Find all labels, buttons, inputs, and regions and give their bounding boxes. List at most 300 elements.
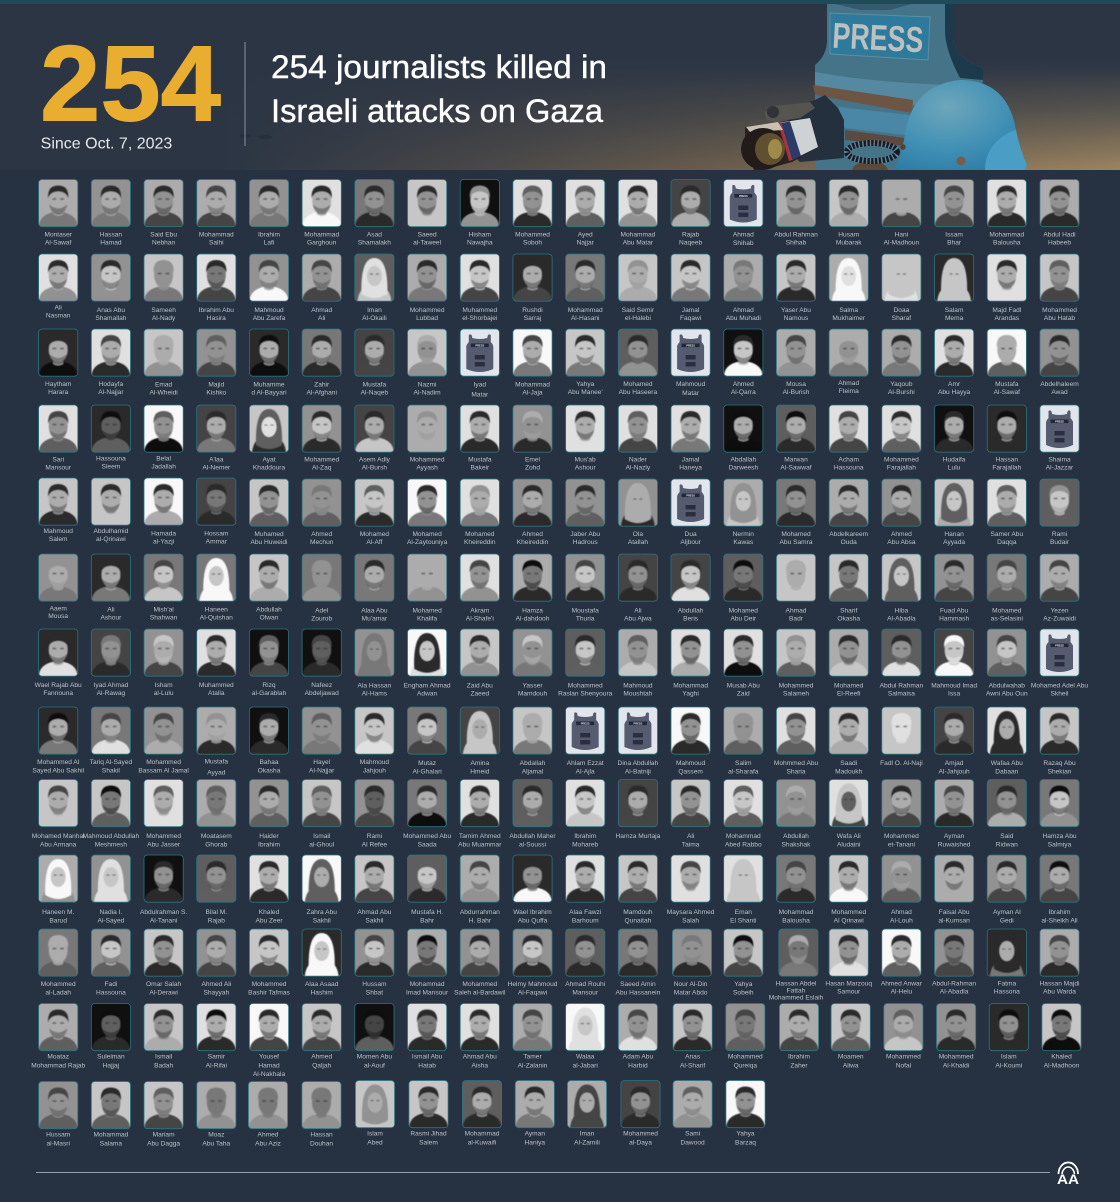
card: Abdallah Aljamal	[513, 707, 552, 776]
card: Ahmad Fteima: Ahmad	[838, 380, 859, 387]
card: Ahmad Ali	[302, 254, 341, 322]
card: Yaqoub Al-Burshi	[882, 329, 921, 396]
card: Hamza Al-dahdooh: Al-dahdooh	[516, 616, 550, 622]
card: Ahmed Ali Shayyah: Ahmed Ali	[201, 981, 232, 988]
card: Mohammed Abu Saada	[403, 780, 451, 848]
card: Hodayfa Al-Najjar: Hodayfa	[99, 381, 124, 388]
card: Abdul-Rahman Al-Abadla: Abdul-Rahman	[932, 980, 976, 987]
card: Ahmad Al-Louh: Al-Louh	[890, 918, 913, 925]
card: Iyad Ahmad Al-Rawag: Al-Rawag	[97, 690, 126, 697]
card: Hamza Abu Salmiya: Salmiya	[1048, 842, 1072, 848]
card: Hodayfa Al-Najjar: Al-Najjar	[98, 389, 124, 396]
card: A'laa Al-Nemer: Al-Nemer	[202, 464, 231, 472]
card: Mamdouh Qunaitah	[618, 855, 658, 925]
card: Muhammed Al-Bayyari: Muhamme	[253, 382, 285, 388]
card: Abdullah Maher al-Soussi: al-Soussi	[519, 842, 547, 848]
card: Jamal Haneya: Haneya	[679, 464, 702, 472]
card: Ahmad Rouhi Mansour: Ahmad Rouhi	[565, 981, 606, 988]
card: Hassan Douhan: Hassan	[310, 1132, 333, 1139]
card: Alaa Abu Mu'amar	[355, 554, 394, 622]
card: Mohamed Kheireddin	[460, 479, 499, 546]
card: Ali Ashour	[91, 554, 130, 622]
card: Fadi Hassouna: Fadi	[104, 981, 118, 988]
card: Abdulwahab Awni Abu Oun	[986, 629, 1028, 698]
card: Mahmoud Abu Zarefa: Abu Zarefa	[253, 315, 286, 322]
card: Yahya Sobeih: Yahya	[734, 981, 753, 988]
card: Hudaifa Lulu: Lulu	[948, 464, 961, 472]
card: Ayman Haniya	[515, 1080, 554, 1147]
card: Doaa Sharaf	[882, 254, 921, 322]
card: Mohamed Al-Aff: Mohamed	[360, 531, 389, 538]
card: Haneen M. Barud: Barud	[49, 918, 67, 925]
card: Yahya Abu Manee'	[566, 329, 605, 396]
card: Haneen M. Barud	[39, 855, 78, 925]
card: Alaa Fawzi Barhoum: Alaa Fawzi	[569, 909, 602, 916]
card: Ayat Khaddoura	[249, 405, 289, 472]
card: Mohammed Salameh: Salameh	[783, 690, 809, 698]
card: Mohammed Abu Hatab: Abu Hatab	[1044, 315, 1075, 322]
card: Mus'ab Ashour: Mus'ab	[575, 456, 596, 464]
card: Sharif Okasha	[829, 554, 868, 622]
card: Adam Abu Harbid: Harbid	[628, 1062, 648, 1070]
card: Hassan Hamad: Hamad	[100, 240, 122, 246]
card: Yasser Mamdouh: Mamdouh	[518, 690, 547, 698]
card: Mohammed al-Ladah: Mohammed	[41, 981, 76, 988]
card: Ayman Haniya: Haniya	[525, 1140, 545, 1147]
card: Aaem Mousa: Mousa	[48, 613, 68, 620]
card: Musab Abu Zaid: Musab Abu	[727, 682, 760, 690]
card: Helmy Mahmoud Al-Faqawi: Helmy Mahmoud	[508, 981, 558, 988]
card: Mohamed Abu Deir: Abu Deir	[730, 616, 757, 622]
card: Mahmoud Salem	[39, 478, 78, 543]
card: Ahmed Anwar Al-Helu	[881, 929, 923, 996]
card: Shaima Al-Jazzar: Shaima	[1048, 456, 1071, 464]
card: Mohammad Abed Rabbo: Abed Rabbo	[725, 842, 762, 848]
card: Nermin Kawas	[724, 479, 763, 546]
card: Doaa Sharaf: Doaa	[894, 307, 910, 314]
card: Mohammad Abu Matar: Mohammad	[620, 232, 656, 238]
card: Ahmad Abu Sakhil: Ahmad Abu	[357, 909, 392, 916]
card: Mahmoud Jahjouh: Jahjouh	[363, 768, 386, 774]
card: Abdelkareem Ouda: Abdelkareem	[829, 531, 869, 538]
card: Islam Abed: Abed	[367, 1140, 383, 1147]
card: Ahmed Kheireddin	[513, 479, 552, 546]
logo: Anadolu Agency: AA	[1057, 1171, 1079, 1187]
card: Hanan Ayyada	[934, 479, 974, 546]
card: Mohamed El-Reefi	[829, 629, 868, 698]
card: Haneen Al-Qutshan: Al-Qutshan	[200, 614, 233, 622]
card: Hassan Douhan	[302, 1082, 341, 1148]
card: Mahmoud Qassem: Qassem	[678, 768, 703, 776]
card: Yousef Hamad Al-Nakhala: Hamad	[258, 1062, 280, 1070]
footer line	[36, 1172, 1050, 1174]
card: Abdul Hadi Habeeb: Abdul Hadi	[1043, 232, 1076, 238]
card: Ahlam Ezzat Al-Ajla	[566, 707, 605, 776]
card: Ahmad Abu Sakhil	[355, 855, 394, 925]
card: Mohammad Balousha	[987, 180, 1026, 246]
card: Abdulrahman S. Al-Tanani: Abdulrahman S.	[140, 909, 187, 916]
card: Ayman Al Gedi	[987, 855, 1026, 925]
card: Hiba Al-Abadla	[882, 554, 921, 622]
big number: 254	[40, 22, 221, 144]
card: Moatasem Ghorab: Moatasem	[201, 833, 232, 840]
card: Haytham Harara: Haytham	[45, 381, 72, 388]
card: Ibrahim al-Sheikh Ali: Ibrahim	[1048, 909, 1071, 916]
card: Mahmoud Abdullah Meshmesh	[83, 780, 139, 848]
card: Moaz Abu Taha	[197, 1082, 236, 1148]
card: Mohamed Manhal Abu Armana: Abu Armana	[40, 842, 77, 848]
card: Mohammed Abu Saada: Saada	[418, 842, 437, 848]
card: Said Semir el-Halebi	[618, 254, 658, 322]
card: Mohammed Bashir Tafmas: Bashir Tafmas	[248, 990, 291, 997]
card: Sameh Al-Nady	[144, 254, 183, 322]
card: Mohammed Al-Khaldi: Mohammed	[939, 1054, 974, 1061]
card: Abdul-Rahman Al-Abadla: Al-Abadla	[940, 989, 969, 996]
card: Mohammed Al Sayed Abu Sakhil	[32, 707, 85, 774]
card: Mohammed al-Ladah	[39, 929, 78, 997]
card: Issam Bhar	[934, 180, 974, 246]
card: Amjad Al-Jahjouh: Amjad	[945, 760, 964, 767]
card: Amr Abu Hayya: Abu Hayya	[938, 389, 971, 396]
card: Amr Abu Hayya: Amr	[948, 381, 961, 388]
card: Saadi Madoukh: Saadi	[840, 760, 858, 767]
card: Asad Shamalakh: Shamalakh	[358, 240, 391, 246]
card: Mahmoud Matar: Matar	[682, 390, 700, 397]
card: Adel Zourob: Zourob	[311, 616, 332, 622]
card: Abdul Rahman Salmaisa: Abdul Rahman	[880, 682, 924, 690]
card: Moataz Mohammad Rajab: Moataz	[47, 1054, 69, 1061]
card: Rasmi Jihad Salem: Rasmi Jihad	[410, 1131, 447, 1138]
card: Mohammed Al-Khaldi: Al-Khaldi	[943, 1062, 970, 1070]
card: Yahya Sobeih: Sobeih	[733, 990, 754, 997]
card: Ibrahim Mohareb: Ibrahim	[574, 833, 597, 840]
card: Alaa Asaad Hashim	[302, 929, 341, 997]
card: Faisal Abu al-Kumsan: Faisal Abu	[939, 909, 970, 916]
card: Mohammad Imad Mansour: Imad Mansour	[406, 990, 449, 997]
card: Wafaa Abu Dabaan	[987, 707, 1026, 776]
card: Majd Fadl Arandas	[987, 254, 1026, 322]
card: Ahmed Mechun: Ahmed	[311, 531, 332, 538]
card: Abdul Rahman Shihab: Shihab	[786, 240, 807, 246]
card: Doaa Sharaf: Sharaf	[892, 315, 911, 322]
card: Emel Zohd	[513, 405, 552, 472]
header banner	[250, 4, 1120, 170]
card: Ahmad Ali: Ahmad	[311, 307, 332, 314]
card: Eman El Shanti: Eman	[735, 909, 752, 916]
card: Sami Dawood	[673, 1080, 712, 1147]
card: Hamza Abu Salmiya: Hamza Abu	[1042, 833, 1077, 840]
card: Ayman Haniya: Ayman	[525, 1131, 545, 1138]
card: Mohammed Nofal	[884, 1004, 923, 1070]
card: Ahlam Ezzat Al-Ajla: Al-Ajla	[576, 768, 595, 776]
card: Abdallah Darweesh	[724, 405, 763, 472]
card: Rushdi Sarraj: Rushdi	[522, 307, 543, 314]
card: Rasmi Jihad Salem	[409, 1080, 448, 1147]
card: Nader Al-Nazly: Nader	[629, 456, 648, 464]
card: Jamal Faqawi: Jamal	[682, 307, 700, 314]
card: Ahmad Abu Muhadi: Ahmad	[733, 307, 754, 314]
card: Ahmed Anwar Al-Helu: Ahmed Anwar	[881, 980, 923, 987]
card: Abdullah Shakshak: Shakshak	[782, 842, 811, 848]
card: Abdullah Olwan	[249, 554, 289, 622]
card: Hanan Ayyada: Ayyada	[943, 539, 965, 546]
card: Abdallah Aljamal: Abdallah	[520, 760, 546, 767]
card: Faisal Abu al-Kumsan: al-Kumsan	[938, 918, 970, 925]
card: Emad Al-Wheidi	[144, 329, 183, 396]
card: Nadia I. Al-Sayed: Nadia I.	[100, 909, 122, 916]
card: Ahmad Shihab: Ahmad	[733, 232, 754, 238]
card: Ahmad Rouhi Mansour: Mansour	[572, 990, 599, 997]
card: Yahya Abu Manee': Yahya	[576, 381, 595, 388]
card: Mohamed Adel Abu Skheil	[1031, 629, 1088, 698]
card: Said Ebu Nebhan: Said Ebu	[150, 232, 177, 238]
card: Ala Hassan Al-Hams: Al-Hams	[362, 690, 388, 698]
card: Omar Salah Al-Derawi: Al-Derawi	[149, 990, 178, 997]
card: Ibrahim al-Sheikh Ali: al-Sheikh Ali	[1041, 918, 1078, 925]
card: Ahmed Al-Qarra	[724, 329, 763, 396]
card: Ismail Abu Hatab	[408, 1004, 447, 1070]
card: Moataz Mohammad Rajab	[31, 1004, 85, 1070]
card: Hamza Abu Salmiya	[1040, 780, 1079, 848]
card: Zaid Abu Zaeed: Zaeed	[470, 690, 489, 698]
card: Asem Adly Al-Bursh: Al-Bursh	[362, 464, 387, 472]
card: Khaled Abu Zeer	[249, 855, 289, 925]
card: Momen Abu al-Aouf: al-Aouf	[364, 1062, 385, 1070]
card: Ahmad Abu Aisha: Ahmad Abu	[463, 1054, 497, 1061]
card: Ali Abu Ajwa: Ali	[634, 608, 642, 614]
card: Ayman Ruwaished: Ruwaished	[938, 842, 971, 848]
card: Montaser Al-Sawaf: Al-Sawaf	[45, 240, 72, 246]
card: Dua Aljbour	[671, 479, 710, 546]
card: Mohamed Abu Deir	[724, 554, 763, 622]
card: Bilal M. Rajab: Rajab	[208, 918, 225, 925]
card: Mohammad Salama	[91, 1082, 130, 1148]
title: Israeli attacks on Gaza	[271, 93, 604, 129]
card: Akram Al-Shafe'i: Akram	[470, 608, 490, 614]
card: Mustafa Bakeir: Mustafa	[468, 456, 492, 464]
card: Hassan Douhan: Douhan	[310, 1141, 333, 1148]
card: Mohamed Al-Aff: Al-Aff	[366, 539, 383, 546]
card: Rushdi Sarraj: Sarraj	[524, 315, 542, 322]
card: Ayman Al Gedi: Ayman Al	[993, 909, 1021, 916]
card: Hussam Shbat: Shbat	[366, 990, 383, 997]
card: Bahaa Okasha	[249, 707, 289, 774]
card: Mohammad al-Kuwaifi	[462, 1080, 502, 1147]
card: Moamen Aliwa: Aliwa	[843, 1062, 859, 1070]
card: Ahmad Fteima: Fteima	[839, 388, 859, 395]
card: Ibrahim Lafi	[249, 180, 289, 246]
card: Fadi Hassouna	[91, 929, 130, 997]
card: Helmy Mahmoud Al-Faqawi	[508, 929, 558, 997]
card: Suleiman Hajjaj: Suleiman	[97, 1054, 125, 1061]
card: Mutaz Al-Ghalari	[408, 707, 447, 776]
card: Emel Zohd: Zohd	[525, 464, 540, 472]
card: Rami Budair	[1040, 479, 1079, 546]
card: Mohamed Khalifa: Mohamed	[412, 608, 442, 614]
card: Wael Ibrahim Abu Quffa	[513, 855, 552, 925]
card: Ibrahim Abu Hasira: Hasira	[207, 315, 226, 322]
card: Musab Abu Zaid: Zaid	[737, 690, 750, 698]
card: Ahmed Qaljah: Qaljah	[312, 1062, 332, 1070]
card: Mohammad Al-Jaja: Mohammad	[515, 382, 550, 388]
card: Ismail Badah: Ismail	[155, 1054, 173, 1061]
card: Mohammed Ayyash: Mohammed	[410, 456, 445, 464]
card: Mutaz Al-Ghalari: Al-Ghalari	[412, 768, 442, 776]
card: Abdul Rahman Salmaisa	[880, 629, 924, 698]
card: Anas Al-Sharif: Anas	[685, 1054, 701, 1061]
card: Mohamed Abu Haseera	[618, 329, 658, 396]
card: Hisham Nawajha: Nawajha	[467, 240, 493, 246]
card: Moustafa Thuria: Thuria	[576, 616, 595, 622]
card: Ahmed Mechun: Mechun	[310, 539, 334, 546]
card: Hussam al-Masri	[39, 1082, 78, 1148]
card: Tamim Ahmed Abu Muammar: Tamim Ahmed	[459, 833, 501, 840]
card: Mohammad Abed Rabbo: Mohammad	[726, 833, 761, 840]
card: Mohammed Raslan Shenyoura: Mohammed	[568, 682, 603, 690]
card: Ibrahim Mohareb	[566, 780, 605, 848]
card: Mustafa Al-Sawaf	[987, 329, 1026, 396]
card: Ali Abu Ajwa	[618, 554, 658, 622]
card: Mohammed Al-Zaq	[302, 405, 341, 472]
card: Hayel Al-Najjar	[302, 707, 341, 774]
card: Hisham Nawajha	[460, 180, 499, 246]
card: Zaid Abu Zaeed: Zaid Abu	[467, 682, 493, 690]
card: Ayed Najjar: Najjar	[577, 240, 595, 246]
card: Abdurrahman H. Bahr: Abdurrahman	[460, 909, 500, 916]
card: Mohammed Abu Jasser: Abu Jasser	[147, 842, 181, 848]
card: Moatasem Ghorab	[197, 780, 236, 848]
card: Haider Ibrahim	[249, 780, 289, 848]
card: Saadi Madoukh: Madoukh	[835, 768, 863, 776]
card: Moatasem Ghorab: Ghorab	[205, 842, 228, 848]
card: Saeed al-Taweel: Saeed	[418, 232, 437, 238]
card: Fadi Hassouna: Hassouna	[96, 990, 126, 997]
card: Bahaa Okasha: Bahaa	[259, 759, 279, 766]
card: Amina Hmeid: Amina	[470, 760, 489, 767]
card: Muhammed Atalla: Atalla	[208, 690, 225, 697]
card: Ahmed Kheireddin: Ahmed	[522, 531, 543, 538]
card: Iyad Matar: Iyad	[474, 382, 486, 388]
card: Fuad Abu Hammash: Hammash	[939, 616, 969, 622]
card: Ayed Najjar	[566, 180, 605, 246]
card: Tariq Al-Sayed Shakil: Tariq Al-Sayed	[90, 759, 132, 766]
card: Ahmed Kheireddin: Kheireddin	[517, 539, 549, 546]
card: Hasan Marzouq Samour	[825, 929, 872, 996]
card: Alaa Fawzi Barhoum: Barhoum	[572, 918, 599, 925]
card: Mamdouh Qunaitah: Qunaitah	[625, 918, 652, 925]
card: Ahmad Al-Louh: Ahmad	[891, 909, 912, 916]
card: Mohammed Abu Jasser	[144, 780, 183, 848]
card: Momen Abu al-Aouf	[355, 1004, 394, 1070]
card: Mohammed Abu Jasser: Mohammed	[146, 833, 181, 840]
card: Mohammed Raslan Shenyoura	[558, 629, 613, 698]
card: Mohammed Ayyash	[408, 405, 447, 472]
card: Anas Al-Sharif: Al-Sharif	[680, 1062, 705, 1070]
card: Muhammed Atalla	[197, 629, 236, 697]
card: Mohmmed Abu Sharia	[774, 707, 818, 776]
card: Abdulwahab Awni Abu Oun: Awni Abu Oun	[986, 690, 1028, 698]
card: Mohamed as-Selasini	[987, 554, 1026, 622]
card: Muhamed Abu Huweidi: Abu Huweidi	[250, 539, 288, 546]
card: Mohamed Al-Zaytouniya	[407, 479, 448, 546]
card: Mariam Abu Dagga	[144, 1082, 183, 1148]
card: A'laa Al-Nemer	[197, 405, 236, 472]
card: Mohammed Abu Hatab: Mohammed	[1042, 307, 1077, 314]
card: Saeed al-Taweel	[408, 180, 447, 246]
card: Majd Fadl Arandas: Majd Fadl	[992, 307, 1022, 314]
card: Ahmed Abu Absa	[882, 479, 921, 546]
card: Mustafa Ayyad	[197, 707, 236, 776]
card: Ahmed Abu Aziz: Abu Aziz	[255, 1141, 281, 1148]
card: Ahmad Badr	[776, 554, 816, 622]
card: Ahmed Qaljah: Ahmed	[311, 1054, 332, 1061]
card: Mustafa Ayyad: Mustafa	[205, 758, 228, 765]
card: Ali Ashour: Ali	[107, 606, 115, 614]
card: Zahra Abu Sakhil: Sakhil	[313, 918, 331, 925]
card: Hossam Ammar: Ammar	[206, 538, 228, 546]
card: Rami Budair: Budair	[1050, 539, 1070, 546]
card: Mohammed Al Sayed Abu Sakhil: Mohammed Al	[37, 759, 80, 766]
card: Bilal M. Rajab	[197, 855, 236, 925]
card: Suleiman Hajjaj	[91, 1004, 130, 1070]
card: Mohamed Adel Abu Skheil: Skheil	[1051, 690, 1069, 698]
card: Mohamed Khalifa: Khalifa	[417, 616, 438, 622]
card: Yousef Hamad Al-Nakhala: Al-Nakhala	[253, 1071, 285, 1078]
card: Abdelhaleem Awad: Awad	[1051, 389, 1068, 396]
card: Alaa Abu Mu'amar: Mu'amar	[362, 616, 388, 622]
card: Ahmed Abu Aziz: Ahmed	[258, 1132, 279, 1139]
card: Iyad Matar: Matar	[471, 392, 489, 398]
card: Said Ebu Nebhan	[144, 180, 183, 246]
card: Yahya Abu Manee': Abu Manee'	[568, 389, 603, 396]
card: Anas Al-Sharif	[673, 1004, 712, 1070]
card: Mohammed Bassam Al Jamal: Mohammed	[146, 759, 181, 766]
card: Hamza Al-dahdooh: Hamza	[522, 608, 543, 614]
card: Majid Kishko: Kishko	[206, 390, 227, 396]
card: Mohammed Bashir Tafmas	[248, 929, 291, 997]
card: Ahmed Abu Absa: Ahmed	[891, 531, 912, 538]
card: Hanan Ayyada: Hanan	[944, 531, 964, 538]
card: Belal Jadallah	[144, 405, 183, 470]
card: Abdulhamid al-Qrinawi	[91, 478, 130, 543]
card: Mamdouh Qunaitah: Mamdouh	[623, 909, 653, 916]
card: Majid Kishko	[197, 329, 236, 396]
card: Mustafa Al-Sawaf: Mustafa	[995, 381, 1019, 388]
card: Iman Al-Okaili	[355, 254, 394, 322]
card: Maysara Ahmed Salah: Salah	[682, 918, 699, 925]
card: Sharif Okasha: Sharif	[840, 608, 857, 614]
card: Hossam Ammar: Hossam	[204, 530, 229, 538]
card: Hamada al-Yazji: Hamada	[151, 530, 176, 538]
card: Hamza Al-dahdooh	[513, 554, 552, 622]
card: Mohammed Bassam Al Jamal: Bassam Al Jamal	[138, 768, 189, 774]
card: Abdul Rahman Salmaisa: Salmaisa	[888, 690, 915, 698]
card: Hassan Farajallah: Hassan	[996, 456, 1018, 464]
card: Razaq Abu Shekian: Shekian	[1048, 768, 1072, 776]
card: Ali Nasman: Nasman	[46, 312, 71, 320]
card: Dina Abdullah Al-Batniji: Al-Batniji	[625, 768, 651, 776]
card: Anas Abu Shamallah: Shamallah	[95, 315, 127, 322]
card: Yaqoub Al-Burshi: Al-Burshi	[888, 389, 915, 396]
card: Mohammad Garghoun	[302, 180, 341, 246]
card: Abdullah Beris: Beris	[683, 616, 699, 622]
card: Sharif Okasha: Okasha	[837, 616, 860, 622]
illustration: camera	[741, 95, 900, 170]
card: Samir Al-Rifai	[197, 1004, 236, 1070]
card: Mohammed Bassam Al Jamal	[138, 707, 189, 774]
card: Mohammad Imad Mansour	[406, 929, 449, 997]
card: Adel Zourob: Adel	[315, 608, 329, 614]
